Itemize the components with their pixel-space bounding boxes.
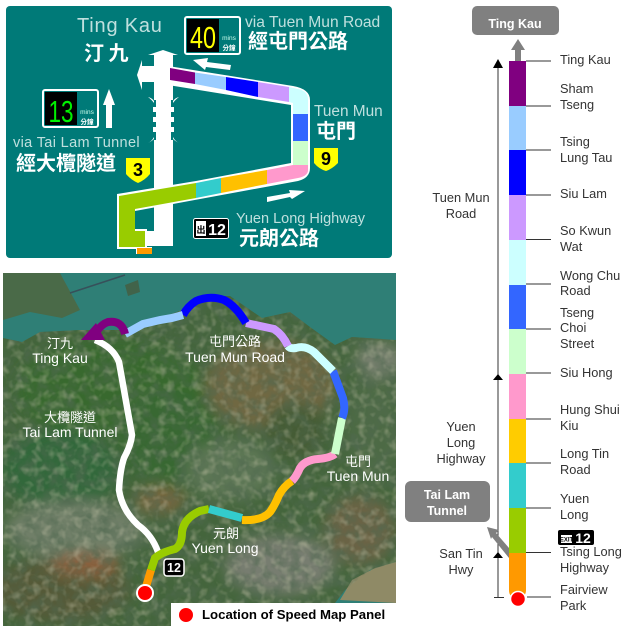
marker: start at Fairview Park (510, 592, 526, 606)
arrow: along Yuen Long Highway (267, 190, 305, 202)
legend: location of speed map panel: Location of Speed Map Panel (202, 607, 385, 622)
sign: exit 12 (194, 218, 228, 239)
station labels: Ting Kau (560, 52, 611, 67)
map labels: 屯門公路 (209, 331, 261, 350)
label: Yuen Long Highway: 元朗公路 (239, 222, 319, 251)
arrow: towards Ting Kau on Tuen Mun Road (193, 58, 231, 70)
sign: 40 minutes via Tuen Mun Road: 40 (190, 20, 216, 55)
heading: Ting Kau: Ting Kau (77, 15, 163, 37)
label: via Tai Lam Tunnel: 經大欖隧道 (16, 147, 116, 176)
station labels: Siu Lam (560, 186, 607, 201)
section labels: Road (446, 206, 476, 221)
legend: location of speed map panel (171, 603, 396, 626)
sign: 13 minutes via Tai Lam Tunnel: 分鐘 (80, 116, 94, 126)
sign: 13 minutes via Tai Lam Tunnel: mins (80, 109, 95, 116)
panel: speed map sign (6, 6, 392, 258)
label: via Tai Lam Tunnel (13, 135, 140, 176)
section labels: Long (447, 435, 475, 450)
sign: 40 minutes via Tuen Mun Road (185, 17, 240, 55)
section labels: San Tin (439, 546, 483, 561)
station labels: Wat (560, 239, 583, 254)
station labels: Park (560, 598, 587, 613)
section labels: Tuen Mun (432, 190, 490, 205)
station labels: Sham (560, 81, 593, 96)
route: Tai Lam Tunnel (95, 340, 158, 552)
sign: exit 12 on diagram (558, 530, 594, 546)
shield: route 3: 3 (133, 160, 143, 180)
box: Tai Lam Tunnel: Tunnel (427, 504, 467, 518)
shield: route 9 (314, 148, 338, 171)
station labels: Long Tin (560, 446, 609, 461)
section labels: Hwy (449, 562, 474, 577)
station labels: So Kwun (560, 223, 611, 238)
station labels: Kiu (560, 418, 578, 433)
label: via Tuen Mun Road (245, 14, 380, 54)
marker: speed map panel location (137, 585, 153, 601)
station labels: Tseng (560, 305, 594, 320)
panel: satellite route map (0, 273, 405, 626)
heading: Ting Kau: 汀 九 (84, 37, 129, 66)
panel: linear route diagram (405, 6, 622, 613)
station labels: Highway (560, 560, 610, 575)
map labels: 大欖隧道 (44, 407, 96, 426)
satellite base: water and land (0, 273, 405, 626)
map labels: Tai Lam Tunnel (23, 424, 117, 440)
sign: 13 minutes via Tai Lam Tunnel (43, 90, 98, 129)
road junction: white carriageway to Ting Kau (137, 50, 179, 246)
station labels: Tseng (560, 97, 594, 112)
station labels: Street (560, 336, 595, 351)
label: Tuen Mun: 屯門 (316, 115, 356, 144)
sign: route 12 marker: 12 (167, 561, 181, 575)
station labels: Yuen (560, 491, 589, 506)
box: Tai Lam Tunnel: Tai Lam (424, 488, 470, 502)
arrow: up to Ting Kau (511, 39, 525, 61)
sign: 40 minutes via Tuen Mun Road: 分鐘 (222, 42, 236, 52)
box: Ting Kau destination (472, 6, 559, 35)
section labels (432, 190, 490, 577)
sign: exit 12: 出 (196, 224, 206, 235)
speed segments column (509, 61, 526, 598)
shield: route 3 (126, 158, 150, 183)
label: via Tai Lam Tunnel: via Tai Lam Tunnel (13, 135, 140, 151)
map labels: Tuen Mun (327, 468, 389, 484)
map labels: Ting Kau (32, 350, 88, 366)
station tick lines (526, 61, 551, 597)
label: Tuen Mun (314, 103, 383, 144)
sign: exit 12 on diagram: EXIT (560, 538, 573, 544)
label: Tuen Mun: Tuen Mun (314, 103, 383, 120)
station labels: Fairview (560, 582, 608, 597)
box: Tai Lam Tunnel (405, 481, 490, 522)
station labels: Lung Tau (560, 150, 612, 165)
station labels: Hung Shui (560, 402, 620, 417)
label: via Tuen Mun Road: via Tuen Mun Road (245, 14, 380, 31)
section labels: Highway (436, 451, 486, 466)
box: Ting Kau destination: Ting Kau (488, 17, 542, 31)
sign: exit 12: 12 (208, 222, 226, 239)
station labels: Long (560, 507, 588, 522)
arrowhead: purple to Ting Kau (81, 323, 105, 340)
station labels: Wong Chu (560, 268, 620, 283)
station labels (560, 52, 622, 613)
sign: route 12 marker (164, 559, 184, 576)
sign: exit 12 on diagram: 12 (575, 530, 591, 546)
sign: 40 minutes via Tuen Mun Road: mins (222, 35, 237, 42)
sign: 13 minutes via Tai Lam Tunnel: 13 (48, 94, 74, 129)
label: Yuen Long Highway (236, 211, 366, 251)
shield: route 9: 9 (321, 149, 331, 169)
map labels: 元朗 (213, 523, 239, 542)
map labels: Yuen Long (192, 540, 258, 556)
station labels: Siu Hong (560, 365, 613, 380)
arrow: up for Tai Lam Tunnel (103, 89, 115, 128)
heading: Ting Kau (77, 15, 163, 66)
coloured speed route band (117, 66, 310, 254)
arrow: branch to Tai Lam Tunnel (487, 527, 509, 558)
label: Yuen Long Highway: Yuen Long Highway (236, 211, 366, 227)
station labels: Tsing Long (560, 544, 622, 559)
station labels: Choi (560, 320, 586, 335)
route: coloured speed segments (97, 298, 344, 590)
route axis with section arrows (493, 59, 504, 598)
station labels: Road (560, 462, 591, 477)
station labels: Road (560, 283, 591, 298)
map labels: Tuen Mun Road (185, 349, 285, 365)
station labels: Tsing (560, 134, 590, 149)
section labels: Yuen (446, 419, 476, 434)
map labels: 屯門 (345, 451, 371, 470)
map labels (23, 331, 389, 556)
label: via Tuen Mun Road: 經屯門公路 (248, 25, 348, 54)
map labels: 汀九 (47, 333, 73, 352)
